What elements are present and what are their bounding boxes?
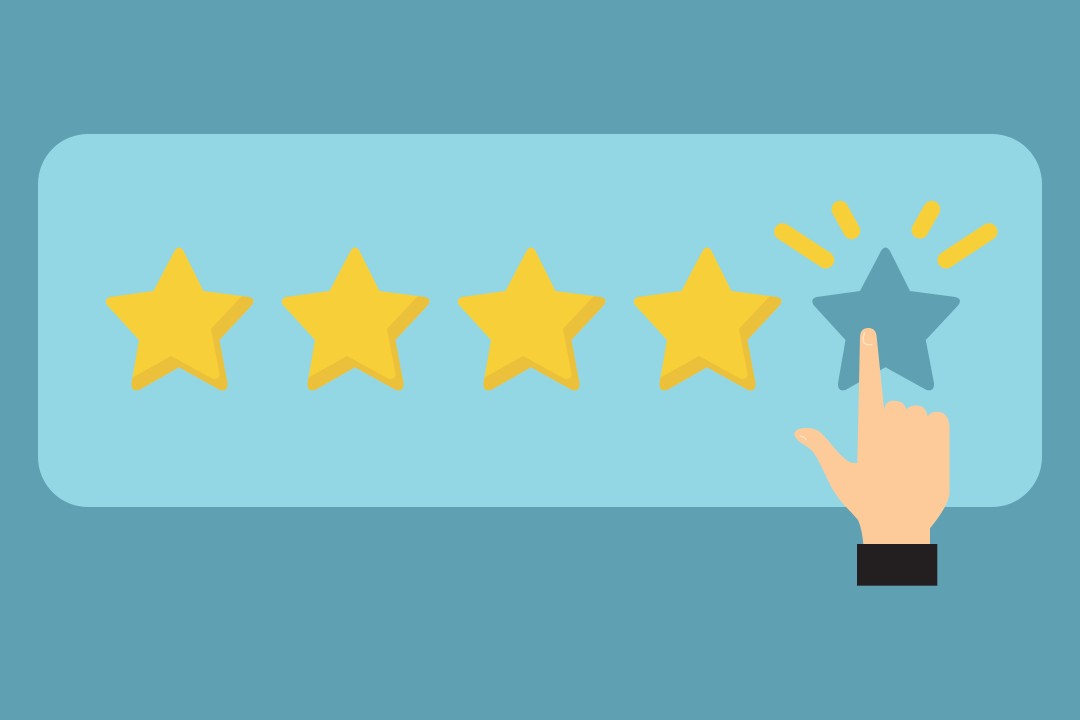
- shirt cuff: [857, 544, 937, 586]
- icon: pointing hand: [794, 328, 950, 586]
- icon: star 1: [106, 248, 253, 390]
- panel: rating card: [38, 134, 1042, 507]
- icon: sparkle rays: [783, 209, 989, 260]
- hand shape: [794, 328, 950, 544]
- icon: star 5 unfilled: [812, 248, 960, 390]
- icon: star 2: [282, 248, 429, 390]
- fingernail highlight: [863, 333, 872, 345]
- icon: star 3: [458, 248, 605, 390]
- thumbnail highlight: [800, 436, 806, 440]
- icon: star 4: [634, 248, 781, 390]
